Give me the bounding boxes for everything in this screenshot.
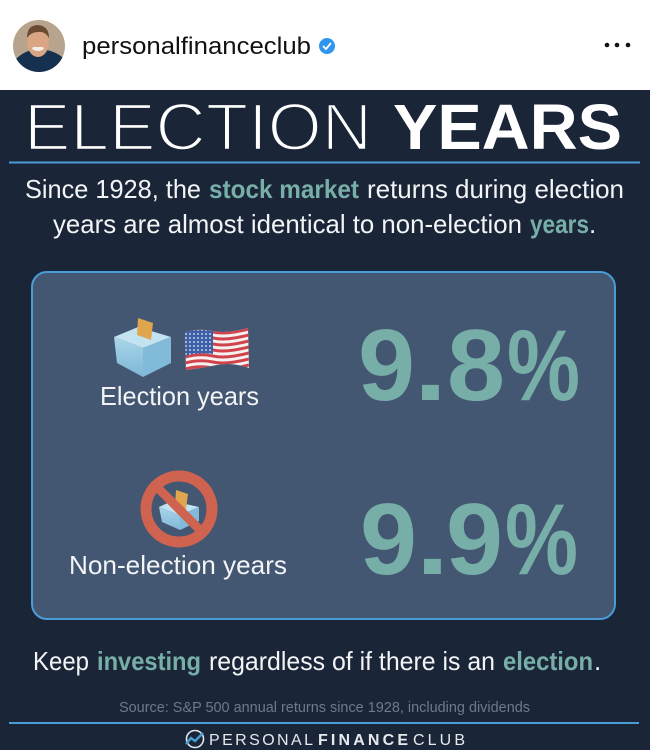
label: non-election years: Non-election years: [69, 550, 287, 580]
panel: comparison: [32, 272, 615, 619]
wordmark: PERSONAL: [209, 732, 313, 749]
footer logo: [186, 730, 465, 749]
icon: no voting: [146, 476, 212, 542]
subtitle: .: [589, 209, 596, 239]
call to action: Keep: [33, 646, 89, 676]
instagram header: [13, 20, 630, 72]
subtitle: years: [530, 209, 589, 239]
wordmark: FINANCE: [318, 732, 408, 749]
source: Source: S&P 500 annual returns since 1928, including dividends: [119, 699, 530, 716]
subtitle: years are almost identical to non-election: [53, 209, 522, 239]
call to action: investing: [97, 646, 201, 676]
value: election years: %: [507, 310, 580, 422]
value: non-election years: 9: [446, 484, 503, 596]
icon: us flag: [185, 325, 249, 371]
value: non-election years: 9: [360, 484, 417, 596]
subtitle: returns during election: [367, 174, 624, 204]
call to action: .: [594, 646, 601, 676]
value: election years: .: [414, 310, 447, 422]
value: non-election years: %: [505, 484, 578, 596]
call to action: [33, 646, 601, 676]
icon: verified badge: [319, 38, 335, 54]
title: YEARS: [393, 91, 622, 163]
call to action: election: [503, 646, 593, 676]
value: non-election years: .: [416, 484, 449, 596]
title: ELECTION: [24, 90, 372, 165]
subtitle: [25, 174, 624, 239]
value: election years: [358, 310, 580, 422]
label: election years: Election years: [100, 381, 259, 411]
value: non-election years: [360, 484, 578, 596]
wordmark: CLUB: [413, 732, 465, 749]
icon: ballot box: [114, 318, 171, 377]
title: [24, 90, 622, 165]
icon: avatar: [13, 20, 65, 72]
username: personalfinanceclub: [82, 33, 311, 60]
value: election years: 9: [358, 310, 415, 422]
icon: logo mark: [186, 730, 204, 748]
subtitle: Since 1928, the: [25, 174, 201, 204]
wordmark: [209, 732, 465, 749]
icon: more dots: [605, 43, 630, 47]
value: election years: 8: [447, 310, 505, 422]
subtitle: stock market: [209, 174, 359, 204]
call to action: regardless of if there is an: [209, 646, 495, 676]
